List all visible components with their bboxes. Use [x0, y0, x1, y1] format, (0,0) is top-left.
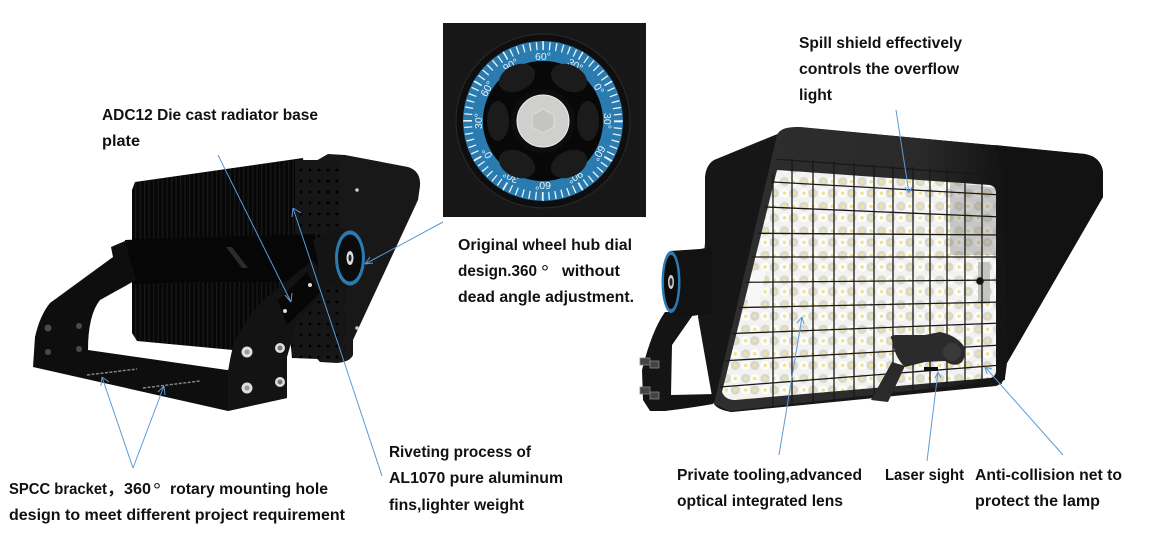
minor ticks [468, 46, 618, 196]
panel plain area [746, 270, 766, 310]
degree labels: 30° [601, 113, 613, 129]
label: wheel hub dial: without [561, 263, 621, 280]
bracket label plate [278, 272, 320, 325]
protective wire mesh [720, 155, 1002, 413]
label: riveting process: AL1070 pure aluminum [389, 470, 563, 487]
leader: riveted fins [292, 208, 382, 476]
label: riveting process: Riveting process of [389, 444, 532, 461]
yoke bracket [33, 241, 287, 411]
label: SPCC bracket: ° [153, 480, 161, 502]
degree labels: 60° [478, 79, 497, 99]
label: SPCC bracket: rotary mounting hole [170, 481, 328, 498]
leader: laser sight [927, 372, 941, 461]
degree labels: 60° [589, 143, 608, 163]
degree labels: 30° [501, 167, 521, 186]
label: riveting process: fins,lighter weight [389, 497, 525, 514]
sensor strip [978, 262, 990, 304]
darker lens patch [950, 182, 996, 255]
centre bolt [517, 95, 569, 147]
shield interior [714, 127, 1005, 411]
label: spill shield: light [799, 87, 833, 104]
right lamp: front view [640, 127, 1103, 413]
bracket right arm [228, 260, 330, 411]
label: laser sight: Laser sight [885, 467, 965, 484]
leader: lens [779, 317, 804, 455]
shield shaded right side [995, 145, 1103, 363]
major ticks [463, 41, 623, 201]
hub blue dial [662, 251, 680, 313]
leader: base plate [218, 155, 292, 302]
lit LED lens panel [722, 170, 996, 400]
label: radiator base plate: plate [102, 133, 140, 150]
blue degree ring [473, 51, 613, 191]
label: wheel hub dial: ° [541, 262, 549, 284]
label: spill shield: Spill shield effectively [799, 35, 962, 52]
label: radiator base plate: ADC12 Die cast radiator base [102, 107, 318, 124]
laser sight body [891, 332, 965, 371]
degree labels: 90° [565, 167, 585, 186]
laser sight mount [871, 362, 905, 402]
bracket bolts [242, 188, 359, 394]
bracket base plate highlights [87, 369, 200, 388]
degree labels: 30° [565, 56, 585, 75]
black core behind fins [132, 170, 300, 345]
pivot hub with blue dial [313, 228, 365, 288]
degree labels: 30° [473, 113, 485, 129]
label: SPCC bracket: design to meet different project requirement [9, 507, 346, 524]
left lamp: rear view [33, 154, 420, 411]
bracket bolts [640, 358, 659, 399]
housing back shield [300, 154, 420, 363]
label: SPCC bracket: ， [107, 481, 123, 498]
label: SPCC bracket: 360 [124, 481, 151, 498]
degree labels [473, 51, 613, 191]
label: anti-collision net: Anti-collision net to [975, 467, 1122, 484]
wheel hub spokes [483, 61, 603, 181]
lower heat sink fins [132, 279, 285, 350]
middle channel band [125, 234, 320, 282]
leader: net [985, 367, 1063, 455]
upper heat sink fins [132, 158, 313, 239]
label: wheel hub dial: design.360 [458, 263, 537, 280]
leader: dial [365, 222, 443, 264]
degree labels: 0° [591, 82, 606, 96]
leader: bracket left [101, 377, 133, 468]
label: wheel hub dial: dead angle adjustment. [458, 289, 634, 306]
label: optical lens: optical integrated lens [677, 493, 843, 510]
label: spill shield: controls the overflow [799, 61, 960, 78]
centre logo [226, 247, 248, 268]
label: optical lens: Private tooling,advanced [677, 467, 862, 484]
degree labels: 60° [535, 51, 551, 63]
degree labels: 60° [535, 179, 551, 191]
arm: pivot bracket [642, 312, 715, 411]
sensor dot [976, 277, 984, 285]
degree labels: 90° [501, 56, 521, 75]
label: wheel hub dial: Original wheel hub dial [458, 237, 632, 254]
label: anti-collision net: protect the lamp [975, 493, 1100, 510]
label: SPCC bracket: SPCC bracket [9, 481, 108, 498]
degree labels: 0° [480, 146, 495, 160]
hub cylinder [670, 247, 712, 316]
upper perforated plate [295, 160, 340, 240]
leader: bracket right [133, 386, 165, 468]
leader: spill shield [896, 110, 912, 193]
callout lines [101, 110, 1063, 476]
bracket side holes [44, 323, 82, 355]
spill shield [698, 127, 1103, 412]
dial close-up photo [443, 23, 646, 217]
lower perforated plate [285, 285, 345, 360]
